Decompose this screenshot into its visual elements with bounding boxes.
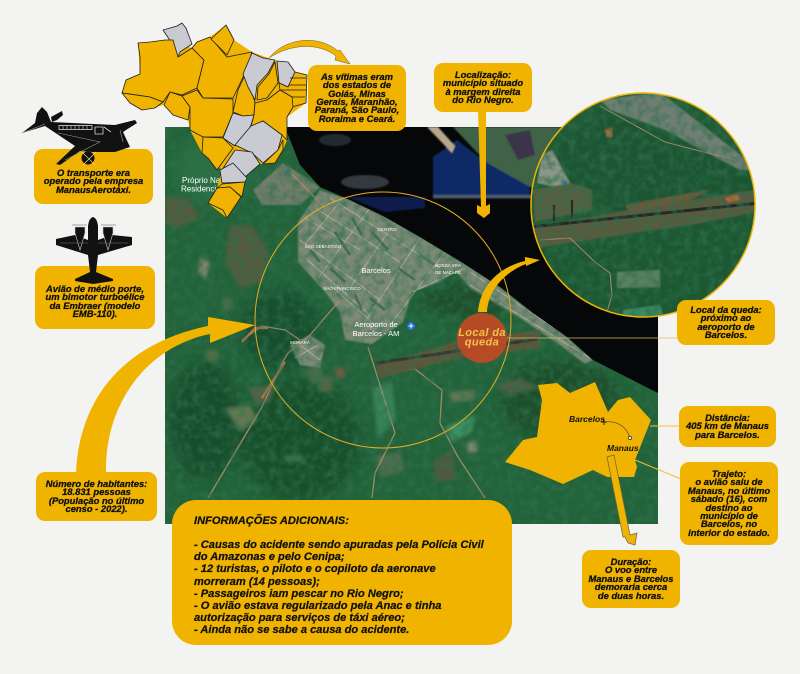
callout: habitantes: Número de habitantes:	[46, 478, 147, 489]
callout: distância	[679, 406, 776, 447]
map labels: NOSSA SRA	[435, 263, 461, 268]
panel: informações adicionais: - Passageiros iam pescar no Rio Negro;	[194, 588, 404, 600]
callout: vítimas: dos estados de	[323, 79, 391, 90]
crash site marker	[457, 313, 507, 363]
callout: trajeto: Barcelos, no	[701, 518, 757, 529]
callout: localização: à margem direita	[445, 86, 521, 96]
callout: transporte: O transporte era	[57, 167, 130, 178]
callout: duração: Manaus e Barcelos	[589, 573, 673, 584]
callout: localização: município situado	[443, 77, 523, 88]
callout: avião: EMB-110).	[73, 308, 117, 319]
callout: trajeto: Trajeto:	[712, 468, 746, 479]
crash site marker: queda	[465, 336, 499, 348]
callout: vítimas: Roraima e Ceará.	[319, 113, 395, 124]
panel: informações adicionais: - O avião estava regularizado pela Anac e tinha	[194, 600, 441, 612]
search radius circle	[255, 192, 511, 448]
callout: local da queda: aeroporto de	[697, 320, 755, 332]
river	[285, 127, 660, 394]
crash site marker: Local da	[458, 327, 506, 339]
map labels: MORARÁ	[290, 339, 310, 345]
satellite photo	[165, 127, 660, 524]
arrow: vítimas	[269, 40, 350, 64]
callout: vítimas: Gerais, Maranhão,	[316, 96, 398, 107]
callout: duração: de duas horas.	[598, 590, 664, 601]
callout: habitantes: (População no último	[49, 494, 144, 506]
icon: plane top view	[56, 217, 132, 284]
callout: trajeto: município de	[700, 510, 758, 521]
satellite map with overlays	[76, 22, 756, 546]
callout: distância: para Barcelos.	[695, 429, 760, 440]
callout: trajeto: Manaus, no último	[688, 485, 770, 496]
panel: informações adicionais: morreram (14 pessoas);	[194, 576, 320, 588]
callout: vítimas: Paraná, São Paulo,	[315, 104, 399, 115]
map labels: Próprio Nac	[182, 176, 224, 185]
map labels	[181, 176, 461, 345]
callout: avião	[35, 266, 155, 329]
map of Amazonas	[505, 382, 681, 484]
map of Brazil	[122, 23, 307, 218]
town	[253, 163, 593, 368]
map labels: SÃO FRANCISCO	[323, 285, 361, 291]
callout: vítimas: As vítimas eram	[321, 71, 393, 82]
callout: local da queda: próximo ao	[701, 312, 751, 323]
opposite bank and clouds	[319, 127, 565, 212]
map of Amazonas: Barcelos	[569, 414, 605, 424]
texture	[165, 127, 658, 524]
airstrip	[376, 330, 540, 378]
callout: local da queda	[677, 300, 775, 345]
callout: localização: do Rio Negro.	[452, 94, 514, 105]
brown and light field patches	[165, 197, 540, 482]
callout: duração	[582, 550, 680, 608]
map labels: CENTRO	[378, 227, 397, 232]
arrow: localização	[477, 110, 490, 218]
callout: duração: O voo entre	[605, 564, 657, 575]
callout: duração: demoraria cerca	[595, 581, 667, 592]
callout: local da queda: Local da queda:	[690, 304, 762, 315]
callout: habitantes: censo - 2022).	[65, 503, 128, 514]
callout: localização: Localização:	[455, 69, 511, 80]
map labels: Aeroporto de	[354, 320, 398, 329]
map labels: Barcelos - AM	[353, 329, 399, 338]
callout: vítimas: Goiás, Minas	[328, 88, 386, 99]
callout: trajeto: o avião saiu de	[695, 476, 763, 487]
panel: informações adicionais: INFORMAÇÕES ADICIONAIS:	[194, 515, 349, 527]
callout: habitantes	[36, 472, 157, 521]
arrow: duração	[607, 455, 637, 545]
callout: habitantes: 18.831 pessoas	[62, 486, 131, 497]
panel: informações adicionais	[172, 500, 512, 645]
callout: avião: um bimotor turboélice	[46, 291, 144, 302]
callout: avião: Avião de médio porte,	[46, 283, 144, 294]
map labels: SÃO SEBASTIÃO	[305, 243, 342, 249]
callout line: local da queda	[505, 337, 677, 339]
map labels: DE NAZARÉ	[435, 269, 461, 275]
panel: informações adicionais: autorização para serviços de táxi aéreo;	[194, 612, 405, 624]
panel: informações adicionais: - Ainda não se sabe a causa do acidente.	[194, 624, 409, 636]
callout: transporte: operado pela empresa	[44, 175, 143, 186]
panel: informações adicionais: - Causas do acidente sendo apuradas pela Polícia Civil	[194, 539, 484, 551]
map of Amazonas: Manaus	[607, 443, 639, 453]
callout: trajeto: sábado (16), com	[691, 493, 767, 504]
callout: trajeto	[680, 462, 778, 545]
callout: transporte: ManausAerotáxi.	[56, 184, 131, 195]
callout: vítimas	[308, 65, 406, 131]
map labels: Residencial	[181, 184, 223, 194]
callout: distância: Distância:	[705, 412, 750, 423]
icon: airport pin	[407, 322, 415, 330]
callout: transporte	[34, 149, 153, 204]
callout: distância: 405 km de Manaus	[686, 420, 769, 431]
callout: avião: da Embraer (modelo	[50, 300, 140, 310]
callout: duração: Duração:	[611, 556, 651, 567]
arrow: to magnified circle	[478, 257, 540, 312]
map labels: Barcelos	[361, 266, 391, 275]
callout: trajeto: interior do estado.	[688, 527, 770, 538]
callout: local da queda: Barcelos.	[705, 329, 747, 340]
magnified airport circle	[530, 90, 760, 325]
panel: informações adicionais: - 12 turistas, o piloto e o copiloto da aeronave	[194, 563, 436, 575]
callout: localização	[434, 63, 532, 112]
panel: informações adicionais: do Amazonas e pelo Cenipa;	[194, 551, 345, 563]
callout: trajeto: destino ao	[706, 502, 752, 512]
roads	[208, 172, 485, 498]
arrow: habitantes	[76, 317, 255, 472]
